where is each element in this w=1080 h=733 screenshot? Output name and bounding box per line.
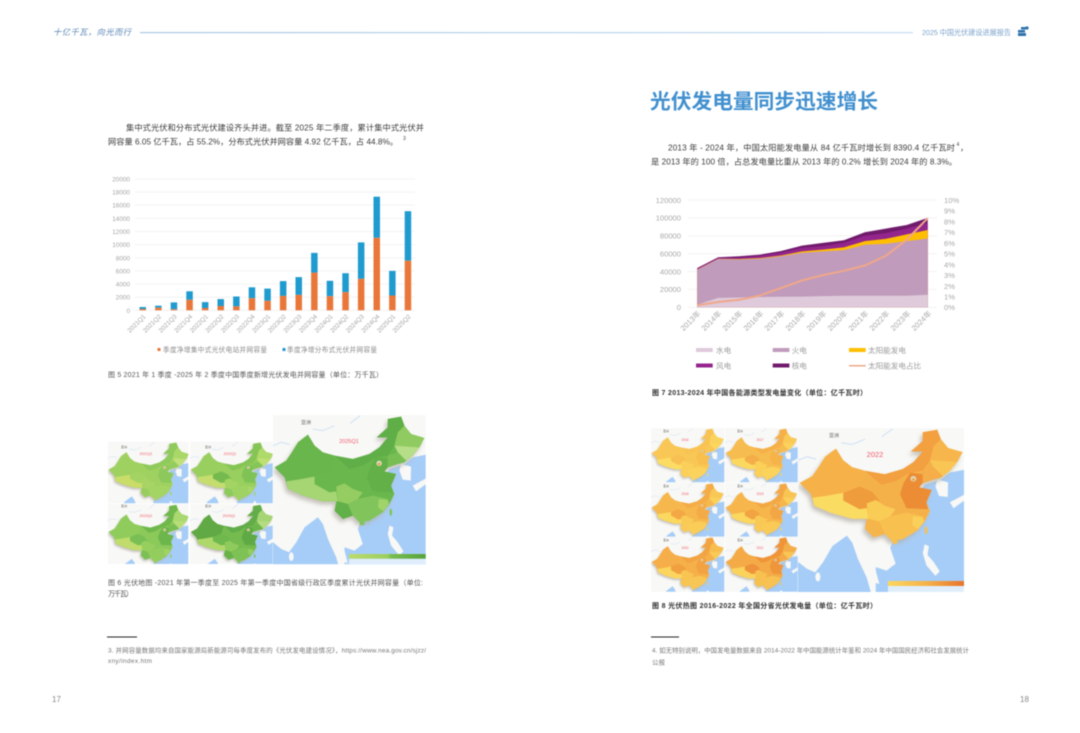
chart legend: 火电 <box>792 345 807 355</box>
map: 2016: 亚洲 <box>663 429 669 433</box>
x axis labels: 2022Q2 <box>204 313 226 335</box>
chart legend <box>696 345 922 370</box>
chart: quarterly new PV capacity (figure 5) <box>112 176 415 354</box>
header <box>53 26 1029 37</box>
x axis labels: 2013年 <box>678 308 703 333</box>
x axis labels: 2021Q2 <box>142 313 163 335</box>
y axis labels: 0 <box>126 308 130 315</box>
map: 2022Q1 <box>190 441 274 528</box>
chart legend: 太阳能发电占比 <box>868 360 922 370</box>
right page intro paragraph: 2013 年 - 2024 年，中国太阳能发电量从 84 亿千瓦时增长到 8390.4 亿千瓦时 <box>668 142 955 152</box>
map: 2018 <box>651 482 724 559</box>
right page intro paragraph: 是 2013 年的 100 倍，占总发电量比重从 2013 年的 0.2% 增长到 2024 年的 8.3%。 <box>651 156 957 166</box>
map: 2021Q1 <box>108 441 190 528</box>
map: 2018: 亚洲 <box>663 484 669 488</box>
footnote 3: 3. 并网容量数据均来自国家能源局新能源司每季度发布的《光伏发电建设情况》，https://www.nea.gov.cn/sjzz/ <box>108 646 426 654</box>
caption: figure 5: 图 5 2021 年 1 季度 -2025 年 2 季度中国季度新增光伏发电并网容量（单位：万千瓦） <box>108 370 383 379</box>
footnote 4: 公报 <box>652 658 666 666</box>
map: 2022 large: 亚洲 <box>829 433 839 439</box>
map: 2021 <box>725 536 798 614</box>
right page intro paragraph: ， <box>960 144 968 152</box>
right axis labels: 5% <box>944 250 955 259</box>
area: wind <box>697 223 928 307</box>
x axis labels: 2022Q4 <box>236 313 257 335</box>
stacked bars <box>140 197 411 310</box>
map: 2023Q1: 2023Q1 <box>140 514 152 518</box>
map: 2025Q1 large <box>273 414 426 576</box>
y axis labels: 8000 <box>116 255 130 262</box>
page number 18: 18 <box>1020 695 1029 704</box>
left page intro paragraph: 网容量 6.05 亿千瓦，占 55.2%，分布式光伏并网容量 4.92 亿千瓦，占 44.8%。 <box>108 136 398 146</box>
chart legend: 风电 <box>716 360 732 370</box>
map: 2023Q1: 亚洲 <box>121 504 127 508</box>
caption: figure 6 <box>108 578 423 598</box>
x axis labels: 2021Q1 <box>126 313 148 335</box>
x axis labels: 2023Q1 <box>251 313 273 335</box>
report title: 2025 中国光伏建设进展报告 <box>922 28 1011 37</box>
left page intro paragraph: 集中式光伏和分布式光伏建设齐头并进。截至 2025 年二季度，累计集中式光伏并 <box>126 122 424 132</box>
chart legend: 水电 <box>716 345 732 355</box>
left axis labels: 20000 <box>660 285 681 294</box>
area: thermal <box>697 238 928 307</box>
caption: figure 6: 图 6 光伏地图 -2021 年第一季度至 2025 年第一季度中国省级行政区季度累计光伏并网容量（单位: <box>108 578 423 587</box>
left axis labels: 60000 <box>660 250 681 258</box>
x axis labels: 2019年 <box>804 308 829 333</box>
area: hydro <box>697 295 928 307</box>
map: 2025Q1 large: 亚洲 <box>301 420 311 426</box>
y axis labels: 12000 <box>112 229 130 236</box>
left axis labels: 0 <box>677 303 681 312</box>
map: 2019: 亚洲 <box>737 484 743 488</box>
header slogan: 十亿千瓦，向光而行 <box>53 28 133 37</box>
map legend <box>888 581 964 592</box>
x axis labels: 2023Q3 <box>282 313 304 335</box>
right axis labels: 3% <box>944 271 955 280</box>
right page intro paragraph: 4 <box>956 142 960 148</box>
x axis labels: 2024Q1 <box>314 313 335 335</box>
map: 2022Q1: 2022Q1 <box>224 452 236 456</box>
map legend <box>349 554 426 564</box>
x axis labels: 2016年 <box>741 308 766 333</box>
map: 2017: 2017 <box>756 438 764 442</box>
right axis labels: 0% <box>944 303 955 312</box>
right axis labels: 8% <box>944 217 955 226</box>
right page intro paragraph <box>651 142 968 166</box>
x axis labels: 2023Q4 <box>298 313 319 335</box>
footnote 4 <box>651 636 970 666</box>
right axis labels: 9% <box>944 207 955 216</box>
y axis labels: 4000 <box>116 282 130 288</box>
map: 2016: 2016 <box>681 438 689 442</box>
x axis labels: 2022Q3 <box>220 313 241 335</box>
x axis labels: 2021Q4 <box>173 313 195 335</box>
x axis labels: 2023年 <box>888 308 913 333</box>
section heading: 光伏发电量同步迅速增长 <box>650 90 878 114</box>
x axis labels: 2020年 <box>825 308 850 333</box>
x axis labels: 2022Q1 <box>189 313 210 335</box>
map: 2024Q1: 2024Q1 <box>223 514 235 518</box>
map: 2021: 亚洲 <box>737 538 743 542</box>
x axis labels: 2015年 <box>720 308 745 333</box>
map: 2022Q1: 亚洲 <box>205 445 211 449</box>
x axis labels: 2018年 <box>783 308 808 333</box>
chart legend: 核电 <box>792 360 807 370</box>
map: 2021Q1: 亚洲 <box>121 445 127 449</box>
area: solar <box>697 230 928 307</box>
footnote 3: xny/index.htm <box>108 658 152 665</box>
right axis labels: 1% <box>944 292 955 302</box>
y axis labels: 6000 <box>116 268 130 275</box>
map: 2020 <box>651 536 724 614</box>
y axis labels: 10000 <box>112 242 130 249</box>
x axis labels: 2025Q1 <box>376 313 397 335</box>
chart legend: 季度净增分布式光伏并网容量 <box>287 345 377 354</box>
y axis labels: 14000 <box>112 216 130 223</box>
caption: figure 7: 图 7 2013-2024 年中国各能源类型发电量变化（单位：亿千瓦时） <box>652 388 867 397</box>
map: 2025Q1 large: 2025Q1 <box>339 439 359 445</box>
x axis labels: 2024Q4 <box>360 313 382 335</box>
chart: generation by energy source (figure 7) <box>656 196 959 370</box>
map: 2019: 2019 <box>756 492 764 496</box>
x axis labels: 2024Q2 <box>329 313 351 335</box>
right axis labels: 7% <box>944 228 955 237</box>
y axis labels: 20000 <box>112 176 130 184</box>
x axis labels: 2017年 <box>762 308 787 333</box>
x axis labels: 2022年 <box>867 308 892 333</box>
maps: cumulative PV capacity (figure 6) <box>108 414 426 590</box>
caption: figure 8: 图 8 光伏热图 2016-2022 年全国分省光伏发电量（单位：亿千瓦时） <box>652 601 877 610</box>
map: 2021Q1: 2021Q1 <box>140 452 152 456</box>
map: 2020: 2020 <box>681 546 689 550</box>
map: 2024Q1 <box>190 503 274 590</box>
x axis labels: 2023Q2 <box>267 313 288 335</box>
map: 2021: 2021 <box>756 546 764 550</box>
x axis labels: 2024Q3 <box>345 313 366 335</box>
right axis labels: 4% <box>944 260 955 269</box>
map: 2023Q1 <box>108 503 190 590</box>
map: 2024Q1: 亚洲 <box>205 504 211 508</box>
x axis labels: 2025Q2 <box>392 313 413 335</box>
x axis labels: 2014年 <box>699 308 724 333</box>
right axis labels <box>944 196 959 312</box>
footnote 3 <box>107 636 426 665</box>
left axis labels: 80000 <box>660 232 681 241</box>
y axis labels: 16000 <box>112 203 130 210</box>
left axis labels <box>656 196 681 312</box>
header rule <box>140 32 913 33</box>
chart legend: 季度净增集中式光伏电站并网容量 <box>163 345 267 354</box>
map: 2022 large <box>798 427 964 597</box>
map: 2020: 亚洲 <box>663 538 669 542</box>
chart legend <box>158 345 377 354</box>
left page intro paragraph <box>108 122 424 146</box>
right axis labels: 10% <box>944 196 959 205</box>
chart legend: 太阳能发电 <box>868 345 906 355</box>
left axis labels: 120000 <box>656 196 681 205</box>
x axis labels: 2024年 <box>909 308 934 333</box>
map: 2019 <box>725 482 798 559</box>
x axis labels <box>126 313 413 335</box>
right axis labels: 6% <box>944 239 955 248</box>
map: 2018: 2018 <box>681 492 689 496</box>
y axis labels <box>112 176 130 315</box>
maps: provincial PV generation (figure 8) <box>651 427 964 614</box>
left page intro paragraph: 3 <box>403 136 406 142</box>
map: 2017 <box>725 428 798 505</box>
x axis labels: 2021年 <box>846 308 871 333</box>
y axis labels: 18000 <box>112 190 130 197</box>
y axis labels: 2000 <box>116 295 130 302</box>
caption: figure 6: 万千瓦） <box>108 589 133 598</box>
map: 2016 <box>651 428 724 505</box>
line: solar share <box>697 218 928 305</box>
right axis labels: 2% <box>944 282 955 291</box>
map: 2022 large: 2022 <box>867 450 883 459</box>
left axis labels: 100000 <box>656 214 681 223</box>
map: 2017: 亚洲 <box>737 429 743 433</box>
page number 17: 17 <box>52 695 61 704</box>
x axis labels <box>678 308 934 333</box>
icon: report mark <box>1018 26 1029 36</box>
left axis labels: 40000 <box>660 267 681 276</box>
area: nuclear <box>697 218 928 307</box>
x axis labels: 2021Q3 <box>158 313 179 335</box>
footnote 4: 4. 如无特别说明，中国发电量数据来自 2014-2022 年中国能源统计年鉴和 2024 年中国国民经济和社会发展统计 <box>652 646 970 654</box>
